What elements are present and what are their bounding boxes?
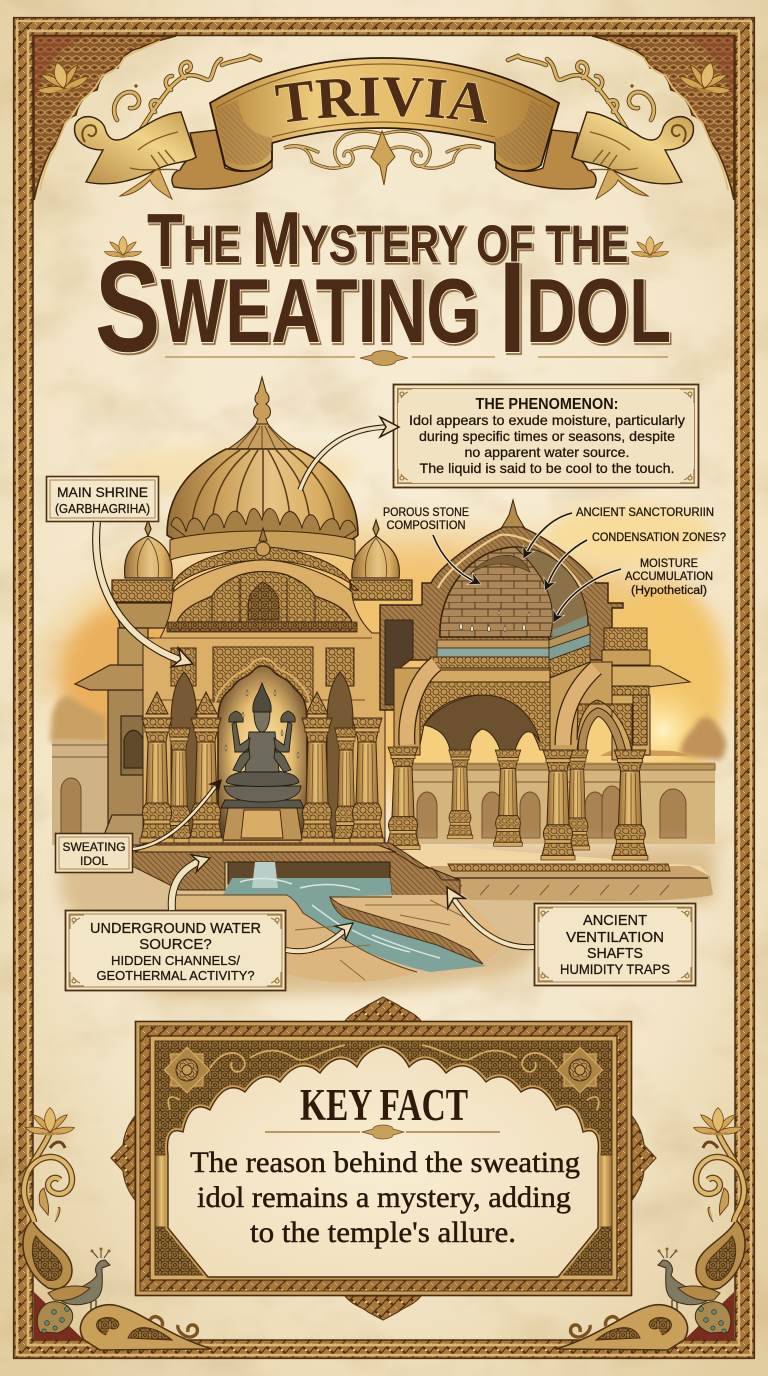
title — [95, 197, 671, 380]
arrow: underground up — [172, 849, 213, 910]
arrow: main shrine — [96, 522, 196, 673]
title line two: S — [95, 235, 160, 379]
key fact body text: to the temple's allure. — [250, 1216, 516, 1249]
distant courtyard wall — [52, 740, 715, 845]
callout: underground water source: GEOTHERMAL ACTIVITY? — [96, 968, 254, 983]
title line two: DOL — [526, 261, 671, 362]
callout text — [409, 396, 685, 476]
label: moisture accumulation: (Hypothetical) — [631, 585, 707, 597]
idol torso and arms — [245, 732, 279, 772]
label: moisture accumulation — [625, 558, 713, 597]
panel: key fact — [111, 997, 656, 1320]
callout: ventilation shafts: ANCIENT — [583, 912, 647, 929]
ribbon title text: TRIVIA — [274, 76, 488, 124]
title line one: HE — [183, 215, 252, 274]
callout: the phenomenon — [394, 384, 698, 488]
cream opening — [168, 1047, 598, 1277]
callout: ventilation shafts: HUMIDITY TRAPS — [560, 961, 670, 977]
icon: title lotus left — [104, 236, 142, 258]
title line two: I — [499, 236, 526, 380]
title line two: WEATING — [160, 261, 499, 362]
callout text: no apparent water source. — [464, 444, 630, 460]
illustration: temple scene — [50, 377, 726, 1000]
colonnade — [386, 662, 648, 860]
colonnade upper wall — [394, 668, 550, 755]
blue moisture band — [437, 640, 549, 648]
key fact body text: idol remains a mystery, adding — [197, 1181, 571, 1214]
ribbon tails — [75, 112, 693, 189]
frame side columns — [155, 1155, 612, 1227]
callout: ventilation shafts: VENTILATION — [566, 929, 664, 946]
callout: underground water source: UNDERGROUND WATER — [90, 920, 261, 937]
callout: main shrine — [46, 476, 158, 522]
callout: sweating idol: SWEATING — [62, 840, 126, 854]
underground water channel — [223, 862, 486, 972]
title line one: T — [147, 199, 183, 283]
left bank flagstones — [170, 895, 417, 982]
label: moisture accumulation: MOISTURE — [640, 558, 698, 570]
callout text: THE PHENOMENON: — [476, 396, 618, 413]
corner ornament: bottom left lotus, paisley and peacock — [23, 1108, 212, 1350]
callout text: Idol appears to exude moisture, particularly — [409, 412, 685, 428]
callout: main shrine: MAIN SHRINE — [57, 484, 148, 500]
icon: title lotus right — [631, 236, 669, 258]
right small dome — [350, 520, 412, 600]
callout: underground water source: SOURCE? — [139, 936, 212, 953]
shrine platform — [120, 843, 460, 896]
idol niche — [218, 666, 307, 840]
idol head and crown — [254, 712, 270, 732]
idol held lotuses — [229, 711, 243, 722]
frame scrollwork — [168, 1045, 599, 1110]
callout: main shrine: (GARBHAGRIHA) — [55, 501, 150, 516]
arrow: sweating idol — [133, 774, 227, 849]
ribbon scrollwork — [114, 56, 654, 199]
ribbon centre — [210, 58, 559, 171]
right cutaway shrine — [380, 500, 623, 710]
dome finial — [254, 377, 270, 424]
facade pillars — [140, 692, 384, 843]
sunset sky — [55, 446, 725, 795]
callout: ventilation shafts — [534, 904, 696, 986]
key fact body text: The reason behind the sweating — [190, 1146, 580, 1179]
callout: ventilation shafts: SHAFTS — [587, 945, 643, 962]
side arches — [171, 672, 197, 845]
arrow: ventilation shafts — [438, 882, 534, 947]
title line one: M — [252, 197, 301, 281]
label: porous stone composition — [383, 507, 469, 532]
frame ornaments — [111, 997, 656, 1320]
cut dome interior — [440, 547, 588, 640]
shrine facade — [143, 560, 385, 850]
sweating idol statue — [221, 683, 304, 840]
corner ornament: top right — [592, 36, 736, 200]
left tower and small dome — [75, 520, 174, 845]
title line one: YSTERY OF THE — [301, 215, 628, 274]
label: porous stone composition: COMPOSITION — [386, 520, 466, 532]
ground and flagstones — [60, 842, 715, 1000]
arrow: condensation — [539, 540, 587, 594]
cut section wall — [380, 520, 623, 710]
dome body — [167, 449, 358, 550]
arrow: porous stone — [433, 535, 484, 590]
distant trees — [50, 696, 726, 760]
corner ornament: bottom right lotus, paisley and peacock — [556, 1108, 745, 1350]
arrow: underground to stream — [286, 916, 358, 951]
idol legs — [226, 768, 299, 786]
main shrine dome — [167, 377, 358, 590]
corner ornament: top left — [32, 36, 176, 200]
colonnade arch interior — [424, 695, 540, 750]
idol pedestal — [223, 808, 302, 840]
trivia ribbon banner — [74, 53, 694, 200]
arrow: moisture — [547, 569, 621, 626]
frame rosettes — [164, 1047, 210, 1093]
key fact body text — [190, 1146, 580, 1249]
callout: underground water source: HIDDEN CHANNELS/ — [111, 953, 240, 968]
heading divider — [265, 1125, 500, 1139]
label: moisture accumulation: ACCUMULATION — [625, 571, 713, 583]
arrow: phenomenon to dome — [300, 417, 399, 490]
frame border — [136, 1022, 632, 1296]
label: ancient sanctorum: ANCIENT SANCTORURIIN — [576, 507, 714, 519]
callout: sweating idol — [56, 834, 132, 872]
label: porous stone composition: POROUS STONE — [383, 507, 469, 519]
callout: underground water source — [66, 910, 286, 990]
dome collar — [170, 531, 355, 560]
key fact heading: KEY FACT — [300, 1080, 468, 1130]
stone slab — [330, 895, 505, 964]
right railing and eave — [602, 628, 692, 756]
callout text: during specific times or seasons, despite — [419, 428, 675, 444]
colonnade voussoir arches — [407, 664, 436, 745]
callout text: The liquid is said to be cool to the touch. — [420, 460, 674, 476]
title divider — [165, 351, 668, 365]
label: condensation zones: CONDENSATION ZONES? — [592, 532, 726, 544]
arrow: sanctorum — [517, 513, 572, 562]
upper arch carving — [177, 572, 352, 622]
callout: sweating idol: IDOL — [80, 854, 108, 868]
